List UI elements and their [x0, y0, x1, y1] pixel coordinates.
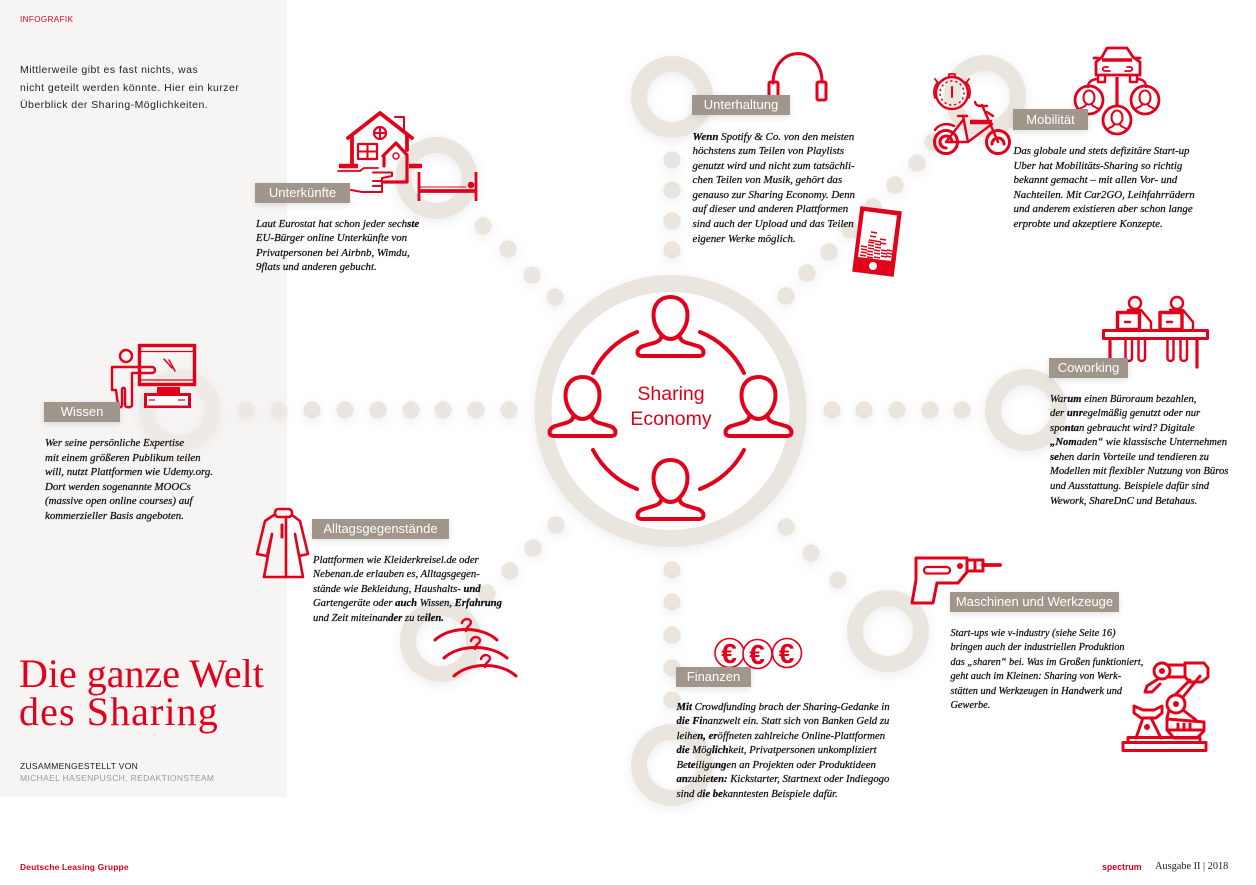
icon: presenter with screen — [110, 344, 196, 408]
body text: der unregelmäßig genutzt oder nur — [1050, 408, 1200, 419]
body text — [1013, 145, 1195, 230]
body text: chen Teilen von Musik, gehört das — [692, 174, 842, 186]
body text: Warum einen Büroraum bezahlen, — [1050, 394, 1196, 404]
footer right: magazine and issue: spectrum — [1102, 862, 1142, 872]
body text: Gartengeräte oder auch Wissen, Erfahrung — [313, 598, 502, 609]
body text: kommerzieller Basis angeboten. — [45, 510, 184, 522]
body text: die Finanzwelt ein. Statt sich von Banken Geld zu — [676, 715, 889, 727]
icon: headphones — [768, 52, 828, 102]
heading: Unterhaltung — [704, 97, 778, 112]
body text: auf dieser und anderen Plattformen — [692, 203, 848, 215]
panel: Coworking — [1047, 296, 1228, 507]
body text: EU-Bürger online Unterkünfte von — [256, 232, 407, 244]
body text: geht auch im Kleinen: Sharing von Werk- — [950, 671, 1121, 682]
body text: Beteiligungen an Projekten oder Produktideen — [676, 759, 876, 771]
body text: Das globale und stets defizitäre Start-up — [1014, 145, 1189, 157]
body text — [256, 218, 420, 273]
heading — [312, 519, 449, 539]
body text: sind die bekanntesten Beispiele dafür. — [676, 788, 838, 800]
centre text: Economy — [630, 408, 712, 430]
icon: three euro coins: € — [749, 639, 765, 670]
body text: Laut Eurostat hat schon jeder sechste — [256, 218, 419, 230]
body text: bekannt gemacht – mit allen Vor- und — [1014, 174, 1177, 186]
credits — [20, 761, 214, 783]
heading — [676, 667, 751, 687]
body text: Nachteilen. Mit Car2GO, Leihfahrrädern — [1014, 189, 1195, 201]
body text: sehen darin Vorteile und tendieren zu — [1050, 452, 1209, 463]
footer right: magazine and issue — [1102, 861, 1228, 872]
footer left: publisher: Deutsche Leasing Gruppe — [20, 862, 129, 872]
intro text: Mittlerweile gibt es fast nichts, was — [20, 64, 198, 76]
body text: Wer seine persönliche Expertise — [45, 437, 184, 449]
body text: stände wie Bekleidung, Haushalts- und — [313, 584, 481, 595]
body text: leihen, eröffneten zahlreiche Online-Plattformen — [676, 730, 885, 742]
body text: Modellen mit flexibler Nutzung von Büros — [1050, 466, 1228, 477]
body text: erprobte und akzeptiere Konzepte. — [1014, 218, 1163, 230]
icon: three euro coins: € — [779, 638, 795, 669]
kicker: INFOGRAFIK — [20, 15, 73, 24]
heading — [44, 402, 120, 422]
intro text — [20, 64, 239, 111]
heading: Wissen — [61, 404, 103, 419]
body text: 9flats und anderen gebucht. — [256, 261, 377, 273]
panel: Finanzen — [674, 638, 890, 800]
body text — [44, 437, 213, 522]
heading — [255, 183, 350, 203]
body text: und Zeit miteinander zu teilen. — [313, 613, 444, 624]
footer right: magazine and issue: Ausgabe II | 2018 — [1155, 861, 1228, 872]
body text — [950, 628, 1143, 711]
body text: Start-ups wie v-industry (siehe Seite 16) — [950, 628, 1116, 638]
body text: bringen auch der industriellen Produktion — [950, 642, 1125, 653]
body text: und anderem existieren aber schon lange — [1014, 203, 1193, 215]
title: Die ganze Welt — [19, 651, 264, 696]
centre text — [630, 383, 712, 430]
heading: Coworking — [1058, 360, 1119, 375]
body text — [676, 700, 890, 800]
icon: three euro coins — [714, 638, 802, 670]
panel: Unterkünfte — [253, 111, 478, 273]
panel: centre Sharing Economy — [548, 295, 794, 521]
body text: genauso zur Sharing Economy. Denn — [692, 189, 855, 201]
heading: Alltagsgegenstände — [323, 521, 438, 536]
body text — [692, 130, 855, 245]
body text: Gewerbe. — [950, 700, 990, 711]
body text: stätten und Werkzeugen in Handwerk und — [950, 686, 1122, 697]
body text: anzubieten: Kickstarter, Startnext oder Indiegogo — [676, 773, 889, 785]
icon: two people at a table with laptops — [1102, 296, 1209, 369]
heading: Finanzen — [687, 669, 740, 684]
icon: drill — [910, 556, 1002, 604]
body text: sind auch der Upload und das Teilen — [692, 218, 854, 230]
heading: Maschinen und Werkzeuge — [956, 594, 1113, 609]
panel: left sidebar background — [0, 0, 287, 797]
body text: höchstens zum Teilen von Playlists — [692, 145, 844, 157]
body text: die Möglichkeit, Privatpersonen unkompliziert — [676, 744, 877, 756]
panel: Maschinen und Werkzeuge — [910, 556, 1210, 752]
heading — [1049, 358, 1128, 378]
panel: Wissen — [42, 344, 213, 522]
icon: coat — [256, 508, 310, 578]
body text: mit einem größeren Publikum teilen — [45, 452, 201, 464]
body text: „Nomaden“ wie klassische Unternehmen — [1050, 437, 1227, 448]
title — [19, 651, 264, 734]
body text: das „sharen“ bei. Was im Großen funktioniert, — [950, 657, 1143, 668]
icon: three hangers — [433, 618, 518, 678]
heading: Unterkünfte — [269, 185, 336, 200]
icon: tablet with equaliser — [852, 206, 902, 277]
body text: Uber hat Mobilitäts-Sharing so richtig — [1014, 160, 1182, 172]
title: des Sharing — [19, 688, 219, 734]
panel: Mobilität — [933, 46, 1195, 230]
body text: Wenn Spotify & Co. von den meisten — [692, 130, 854, 142]
body text: spontan gebraucht wird? Digitale — [1050, 423, 1195, 434]
body text: (massive open online courses) auf — [45, 495, 193, 507]
body text — [312, 554, 502, 624]
icon: three euro coins: € — [721, 638, 737, 669]
icon: four connected people — [548, 295, 794, 521]
body text: Plattformen wie Kleiderkreisel.de oder — [313, 554, 479, 566]
body text: genutzt wird und nicht zum tatsächli- — [692, 160, 855, 172]
centre text: Sharing — [637, 383, 705, 405]
panel: Alltagsgegenstände — [256, 508, 518, 678]
intro text: Überblick der Sharing-Möglichkeiten. — [20, 99, 208, 111]
icon: robot arm — [1122, 662, 1210, 752]
heading: Mobilität — [1026, 112, 1075, 127]
heading — [950, 592, 1119, 612]
heading — [1013, 109, 1088, 130]
body text: Privatpersonen bei Airbnb, Wimdu, — [256, 247, 410, 259]
body text: Wework, ShareDnC und Betahaus. — [1050, 496, 1197, 507]
credits: MICHAEL HASENPUSCH, REDAKTIONSTEAM — [20, 773, 214, 783]
panel: intro header — [20, 15, 239, 111]
credits: ZUSAMMENGESTELLT VON — [20, 761, 138, 771]
body text: will, nutzt Plattformen wie Udemy.org. — [45, 466, 213, 478]
panel: Unterhaltung — [690, 52, 902, 277]
body text: eigener Werke möglich. — [692, 233, 796, 245]
icon: stopwatch and bicycle — [933, 73, 1011, 155]
heading — [692, 95, 790, 115]
body text: Nebenan.de erlauben es, Alltagsgegen- — [313, 569, 480, 580]
icon: car shared by three people — [1074, 46, 1160, 136]
intro text: nicht geteilt werden könnte. Hier ein kurzer — [20, 82, 239, 94]
body text: und Ausstattung. Beispiele dafür sind — [1050, 481, 1209, 492]
icon: houses, hand and bed — [337, 111, 478, 201]
body text: Mit Crowdfunding brach der Sharing-Gedanke in — [676, 700, 890, 712]
body text — [1050, 394, 1228, 507]
body text: Dort werden sogenannte MOOCs — [45, 481, 191, 493]
